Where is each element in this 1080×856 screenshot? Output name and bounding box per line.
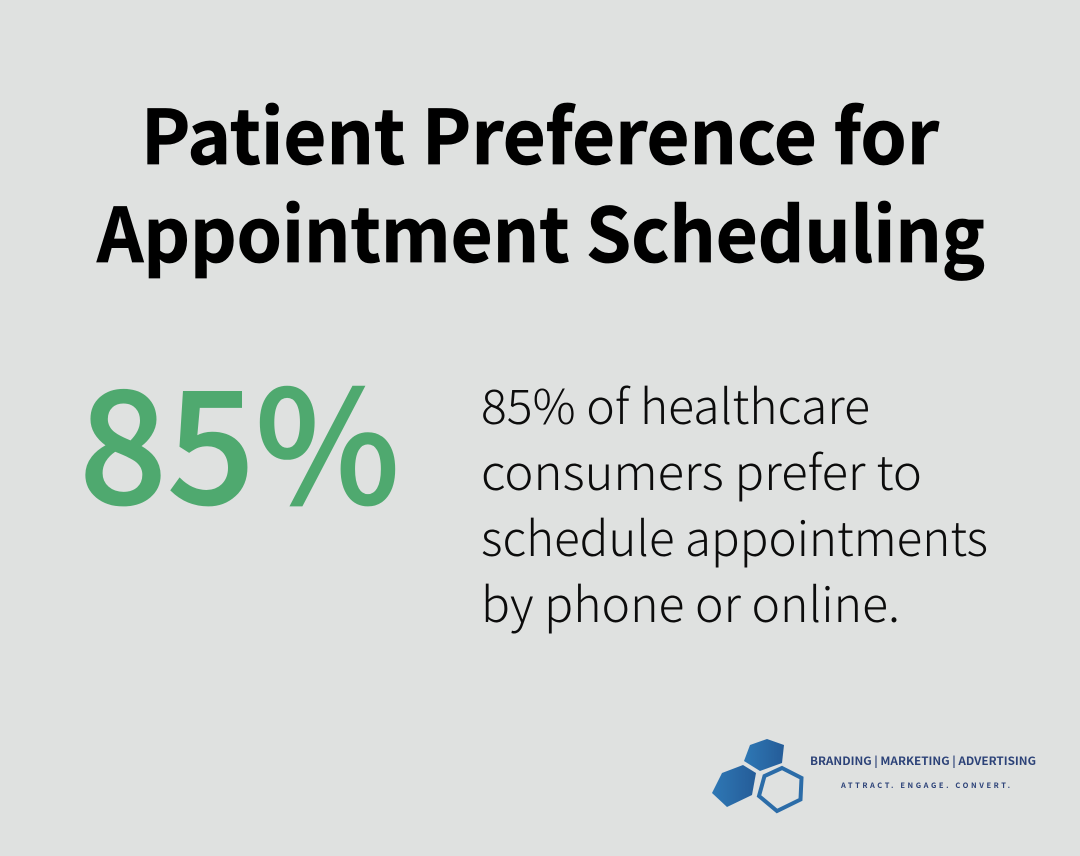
description text [481,368,988,636]
description text: schedule appointments [481,500,988,570]
logo text [810,753,1036,791]
title [96,77,985,284]
description text: consumers prefer to [481,434,922,504]
logo [712,739,1036,811]
description text: 85% of healthcare [481,368,870,438]
logo text: BRANDING | MARKETING | ADVERTISING [810,753,1036,769]
description text: by phone or online. [481,566,900,636]
logo text: ATTRACT. ENGAGE. CONVERT. [840,780,1010,791]
big statistic: 85%: 85% [79,322,400,548]
title: Appointment Scheduling [96,175,985,284]
title: Patient Preference for [141,77,939,186]
icon: hexagon cluster [712,739,802,811]
